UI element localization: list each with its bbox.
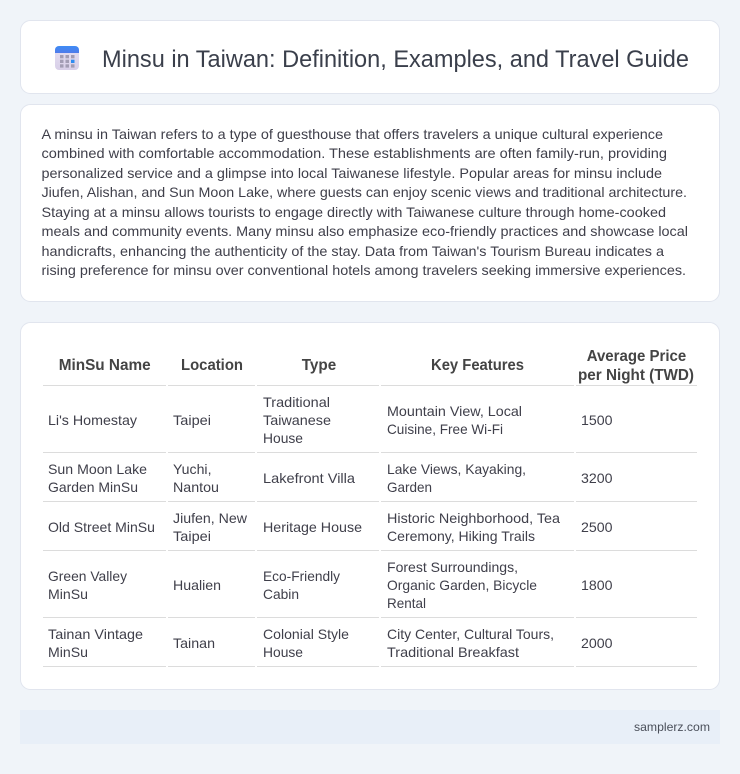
table row: Sun Moon Lake Garden MinSu: Garden MinSu xyxy=(48,479,138,495)
table row: Green Valley MinSu: Forest Surroundings, xyxy=(387,559,518,575)
footer text: samplerz.com xyxy=(634,720,710,734)
table header row: Type xyxy=(302,357,336,374)
table row: Old Street MinSu: Jiufen, New xyxy=(173,510,248,526)
text block: description paragraph: rising preference for minsu over conventional hotels among travelers seeking immersive experiences. xyxy=(42,262,686,278)
text block: description paragraph: Staying at a minsu allows tourists to engage directly with Taiwanese culture through home-cooked xyxy=(42,204,666,220)
table row: Tainan Vintage MinSu: 2000 xyxy=(581,635,613,651)
table row: Old Street MinSu: Historic Neighborhood, Tea xyxy=(387,510,560,526)
table row: Tainan Vintage MinSu: Traditional Breakfast xyxy=(387,644,519,660)
table row: Sun Moon Lake Garden MinSu xyxy=(48,461,613,495)
table row: Green Valley MinSu xyxy=(48,559,613,611)
table row: Li's Homestay: Li's Homestay xyxy=(48,412,137,428)
table row: Li's Homestay xyxy=(48,394,613,446)
panel: description xyxy=(20,104,720,302)
table row: Sun Moon Lake Garden MinSu: Nantou xyxy=(173,479,219,495)
table row: Green Valley MinSu: 1800 xyxy=(581,577,613,593)
table row: Tainan Vintage MinSu: House xyxy=(263,644,303,660)
table header row: per Night (TWD) xyxy=(578,367,694,384)
text block: description paragraph: personalized service and a glimpse into local Taiwanese lifestyle. Popular areas for minsu include xyxy=(42,165,662,181)
table row: Sun Moon Lake Garden MinSu: Lakefront Villa xyxy=(263,470,355,486)
table row: Li's Homestay: Taipei xyxy=(173,412,211,428)
table row: Li's Homestay: Taiwanese xyxy=(263,412,331,428)
table row: Green Valley MinSu: Organic Garden, Bicycle xyxy=(387,577,537,593)
table row: Sun Moon Lake Garden MinSu: 3200 xyxy=(581,470,613,486)
text block: description paragraph: A minsu in Taiwan refers to a type of guesthouse that offers travelers a unique cultural experience xyxy=(42,126,663,142)
table row: Green Valley MinSu: Eco-Friendly xyxy=(263,568,340,584)
title: Minsu in Taiwan: Definition, Examples, and Travel Guide xyxy=(102,46,689,73)
table row: Li's Homestay: Traditional xyxy=(263,394,330,410)
table row: Green Valley MinSu: Green Valley xyxy=(48,568,127,584)
table row: Old Street MinSu: Taipei xyxy=(173,528,211,544)
table row: Li's Homestay: House xyxy=(263,430,303,446)
text block: description paragraph: combined with comfortable accommodation. These establishments are often family-run, providing xyxy=(42,145,667,161)
panel: minsu table xyxy=(20,322,720,690)
table row: Tainan Vintage MinSu: Tainan xyxy=(173,635,215,651)
text block: description paragraph: handicrafts, enhancing the authenticity of the stay. Data from Taiwan's Tourism Bureau indicates a xyxy=(42,243,664,259)
table row: Old Street MinSu: Heritage House xyxy=(263,519,362,535)
panel: title header xyxy=(20,20,720,94)
text block: description paragraph: meals and community events. Many minsu also emphasize eco-friendly practices and showcase local xyxy=(42,223,688,239)
table row: Tainan Vintage MinSu: City Center, Cultural Tours, xyxy=(387,626,554,642)
table row: Sun Moon Lake Garden MinSu: Yuchi, xyxy=(173,461,212,477)
table row: Green Valley MinSu: Cabin xyxy=(263,586,299,602)
table row: Green Valley MinSu: Hualien xyxy=(173,577,221,593)
table header row: Location xyxy=(181,357,243,374)
table row: Tainan Vintage MinSu xyxy=(48,626,613,660)
table row: Tainan Vintage MinSu: MinSu xyxy=(48,644,88,660)
table row: Li's Homestay: Mountain View, Local xyxy=(387,403,522,419)
table row: Old Street MinSu: Old Street MinSu xyxy=(48,519,155,535)
table row: Sun Moon Lake Garden MinSu: Sun Moon Lake xyxy=(48,461,147,477)
table row: Old Street MinSu: Ceremony, Hiking Trails xyxy=(387,528,535,544)
table header row xyxy=(59,348,694,384)
footer bar xyxy=(20,710,720,744)
table row: Green Valley MinSu: Rental xyxy=(387,595,426,611)
table row: Tainan Vintage MinSu: Colonial Style xyxy=(263,626,349,642)
table header row: Key Features xyxy=(431,357,524,374)
icon: calendar xyxy=(55,46,79,70)
table row: Old Street MinSu: 2500 xyxy=(581,519,613,535)
text block: description paragraph: Jiufen, Alishan, and Sun Moon Lake, where guests can enjoy scenic views and traditional architecture. xyxy=(42,184,687,200)
text block: description paragraph xyxy=(42,126,688,278)
table row: Li's Homestay: 1500 xyxy=(581,412,613,428)
table row: Green Valley MinSu: MinSu xyxy=(48,586,88,602)
table header row: MinSu Name xyxy=(59,357,151,374)
table row: Sun Moon Lake Garden MinSu: Lake Views, Kayaking, xyxy=(387,461,526,477)
table row: Sun Moon Lake Garden MinSu: Garden xyxy=(387,479,432,495)
table row: Old Street MinSu xyxy=(48,510,613,544)
table row: Tainan Vintage MinSu: Tainan Vintage xyxy=(48,626,143,642)
table row: Li's Homestay: Cuisine, Free Wi-Fi xyxy=(387,421,503,437)
table header row: Average Price xyxy=(587,348,686,365)
